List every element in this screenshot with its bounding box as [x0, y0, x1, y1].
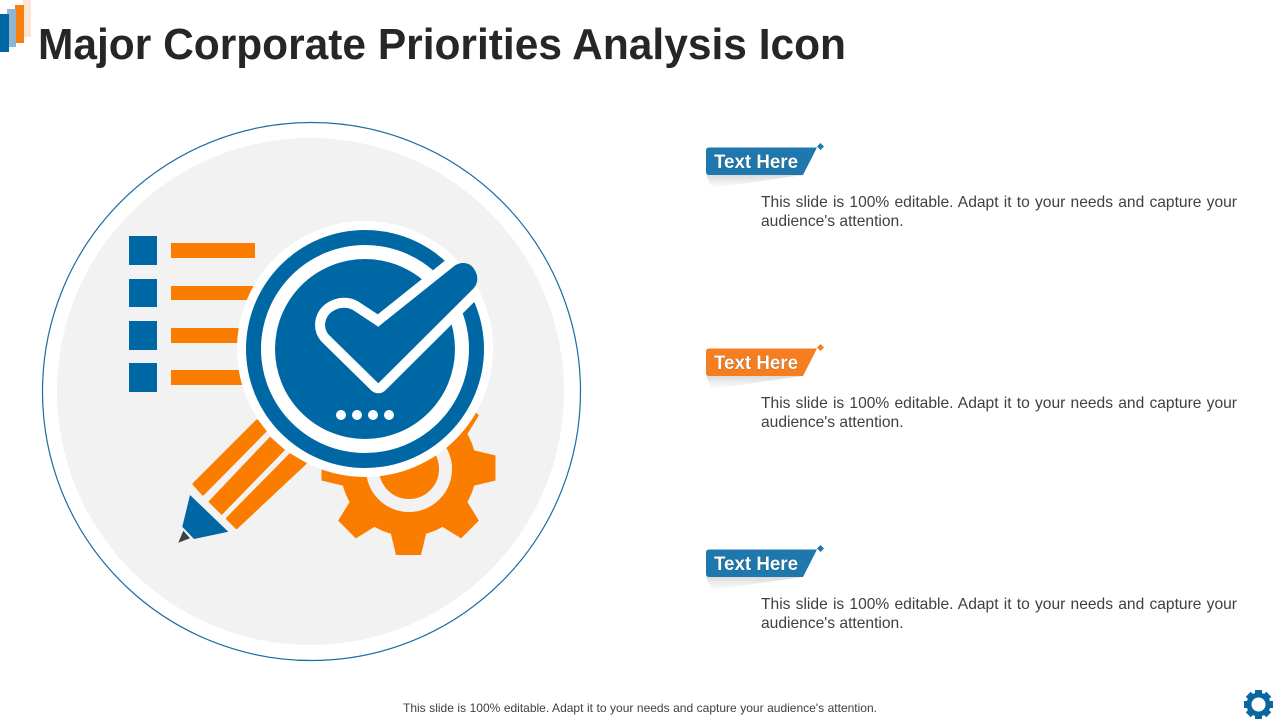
footer note: This slide is 100% editable. Adapt it to your needs and capture your audience's attention. [403, 701, 877, 715]
outer circle outline [42, 122, 580, 660]
label 1: Text Here [706, 143, 824, 188]
icon: gear [322, 381, 496, 555]
icon: magnifier with check mark [237, 221, 493, 477]
panel: circular icon illustration [42, 122, 580, 660]
text block 1: This slide is 100% editable. Adapt it to your needs and capture your audience's attention. [761, 194, 1237, 230]
label 3: Text Here [706, 545, 824, 590]
title: Major Corporate Priorities Analysis Icon [38, 20, 846, 69]
icon: pencil [178, 421, 305, 543]
text block 3: This slide is 100% editable. Adapt it to your needs and capture your audience's attention. [761, 596, 1237, 632]
label 2: Text Here: Text Here [714, 353, 798, 374]
label 2: Text Here [706, 344, 824, 389]
label 1: Text Here: Text Here [714, 152, 798, 173]
label 3: Text Here: Text Here [714, 554, 798, 575]
four dots [336, 410, 394, 420]
icon: checklist [129, 236, 261, 392]
logo accent bars [0, 0, 31, 52]
text block 2: This slide is 100% editable. Adapt it to your needs and capture your audience's attention. [761, 395, 1237, 431]
inner grey disc [57, 138, 564, 645]
check mark [325, 263, 477, 383]
icon: settings gear [1244, 690, 1273, 719]
check mark outline [325, 263, 477, 383]
